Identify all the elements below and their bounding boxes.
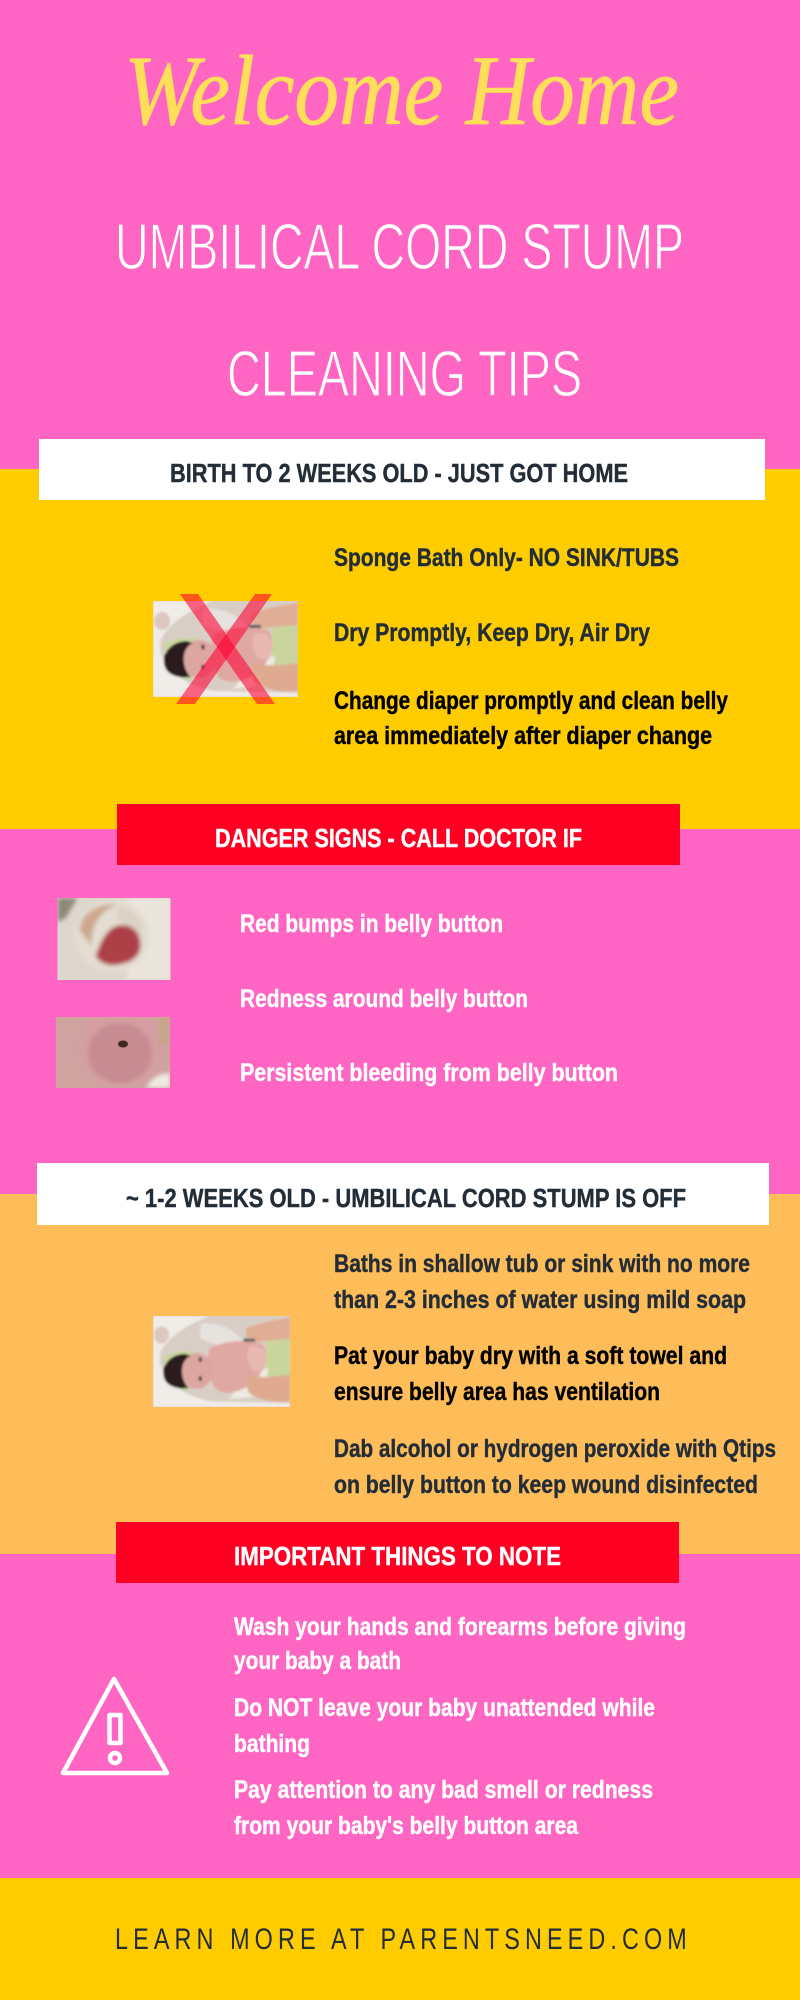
section 2 tips: Pat your baby dry with a soft towel and <box>334 1342 727 1370</box>
important notes list: from your baby's belly button area <box>234 1812 579 1840</box>
important notes list: Pay attention to any bad smell or redness <box>234 1776 653 1804</box>
danger signs list: Persistent bleeding from belly button <box>240 1059 618 1087</box>
important things banner <box>116 1522 679 1583</box>
section 2 tips <box>334 1250 776 1499</box>
section 2 heading banner: ~ 1-2 WEEKS OLD - UMBILICAL CORD STUMP IS OFF <box>126 1183 686 1213</box>
section 1 heading banner: BIRTH TO 2 WEEKS OLD - JUST GOT HOME <box>170 458 628 488</box>
danger signs list <box>240 910 618 1087</box>
danger signs banner <box>117 804 680 865</box>
section 1 tips: Sponge Bath Only- NO SINK/TUBS <box>334 544 679 572</box>
section 2 tips: ensure belly area has ventilation <box>334 1378 660 1406</box>
danger signs list: Redness around belly button <box>240 985 528 1013</box>
important notes list: Wash your hands and forearms before giving <box>234 1613 686 1641</box>
icon: warning triangle <box>63 1679 167 1773</box>
photo: redness around belly button <box>56 1017 170 1088</box>
title: Welcome Home: Welcome Home <box>124 35 679 146</box>
important notes list: Do NOT leave your baby unattended while <box>234 1694 655 1722</box>
section 1 heading banner <box>39 439 765 500</box>
photo: red bumps in belly button <box>58 898 170 980</box>
icon: red cross <box>176 594 275 704</box>
footer call to action: LEARN MORE AT PARENTSNEED.COM <box>115 1922 687 1956</box>
danger signs list: Red bumps in belly button <box>240 910 503 938</box>
important things banner: IMPORTANT THINGS TO NOTE <box>234 1541 561 1571</box>
photo: baby bath crossed out <box>153 594 298 704</box>
important notes list: your baby a bath <box>234 1647 401 1675</box>
section 2 heading banner <box>37 1163 769 1225</box>
section 1 tips: Change diaper promptly and clean belly <box>334 687 728 715</box>
section 1 tips: Dry Promptly, Keep Dry, Air Dry <box>334 619 650 647</box>
important notes list <box>234 1613 686 1840</box>
photo: baby in shallow tub <box>153 1316 290 1407</box>
danger signs banner: DANGER SIGNS - CALL DOCTOR IF <box>215 823 582 853</box>
section 1 tips <box>334 544 728 750</box>
subtitle line: cleaning tips: CLEANING TIPS <box>227 337 582 410</box>
section 1 tips: area immediately after diaper change <box>334 722 712 750</box>
important notes list: bathing <box>234 1730 310 1758</box>
